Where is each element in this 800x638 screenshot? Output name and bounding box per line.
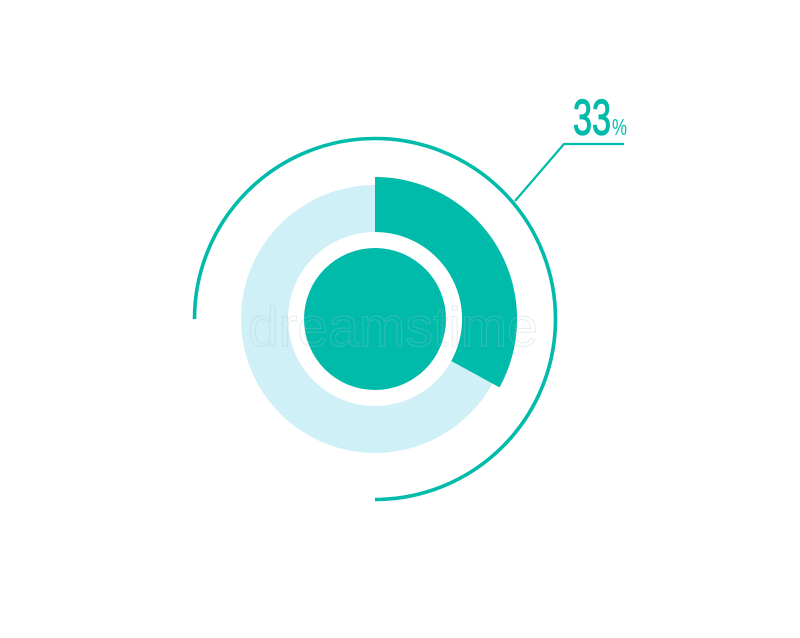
watermark: dreamstime [248,295,538,358]
outer progress arc [194,138,556,500]
leader line [515,144,624,201]
center disc [304,248,446,390]
highlighted 33 percent segment [375,177,517,387]
percentage label: 33 [573,90,611,146]
light ring track [241,185,509,453]
percentage label: % [612,114,627,140]
